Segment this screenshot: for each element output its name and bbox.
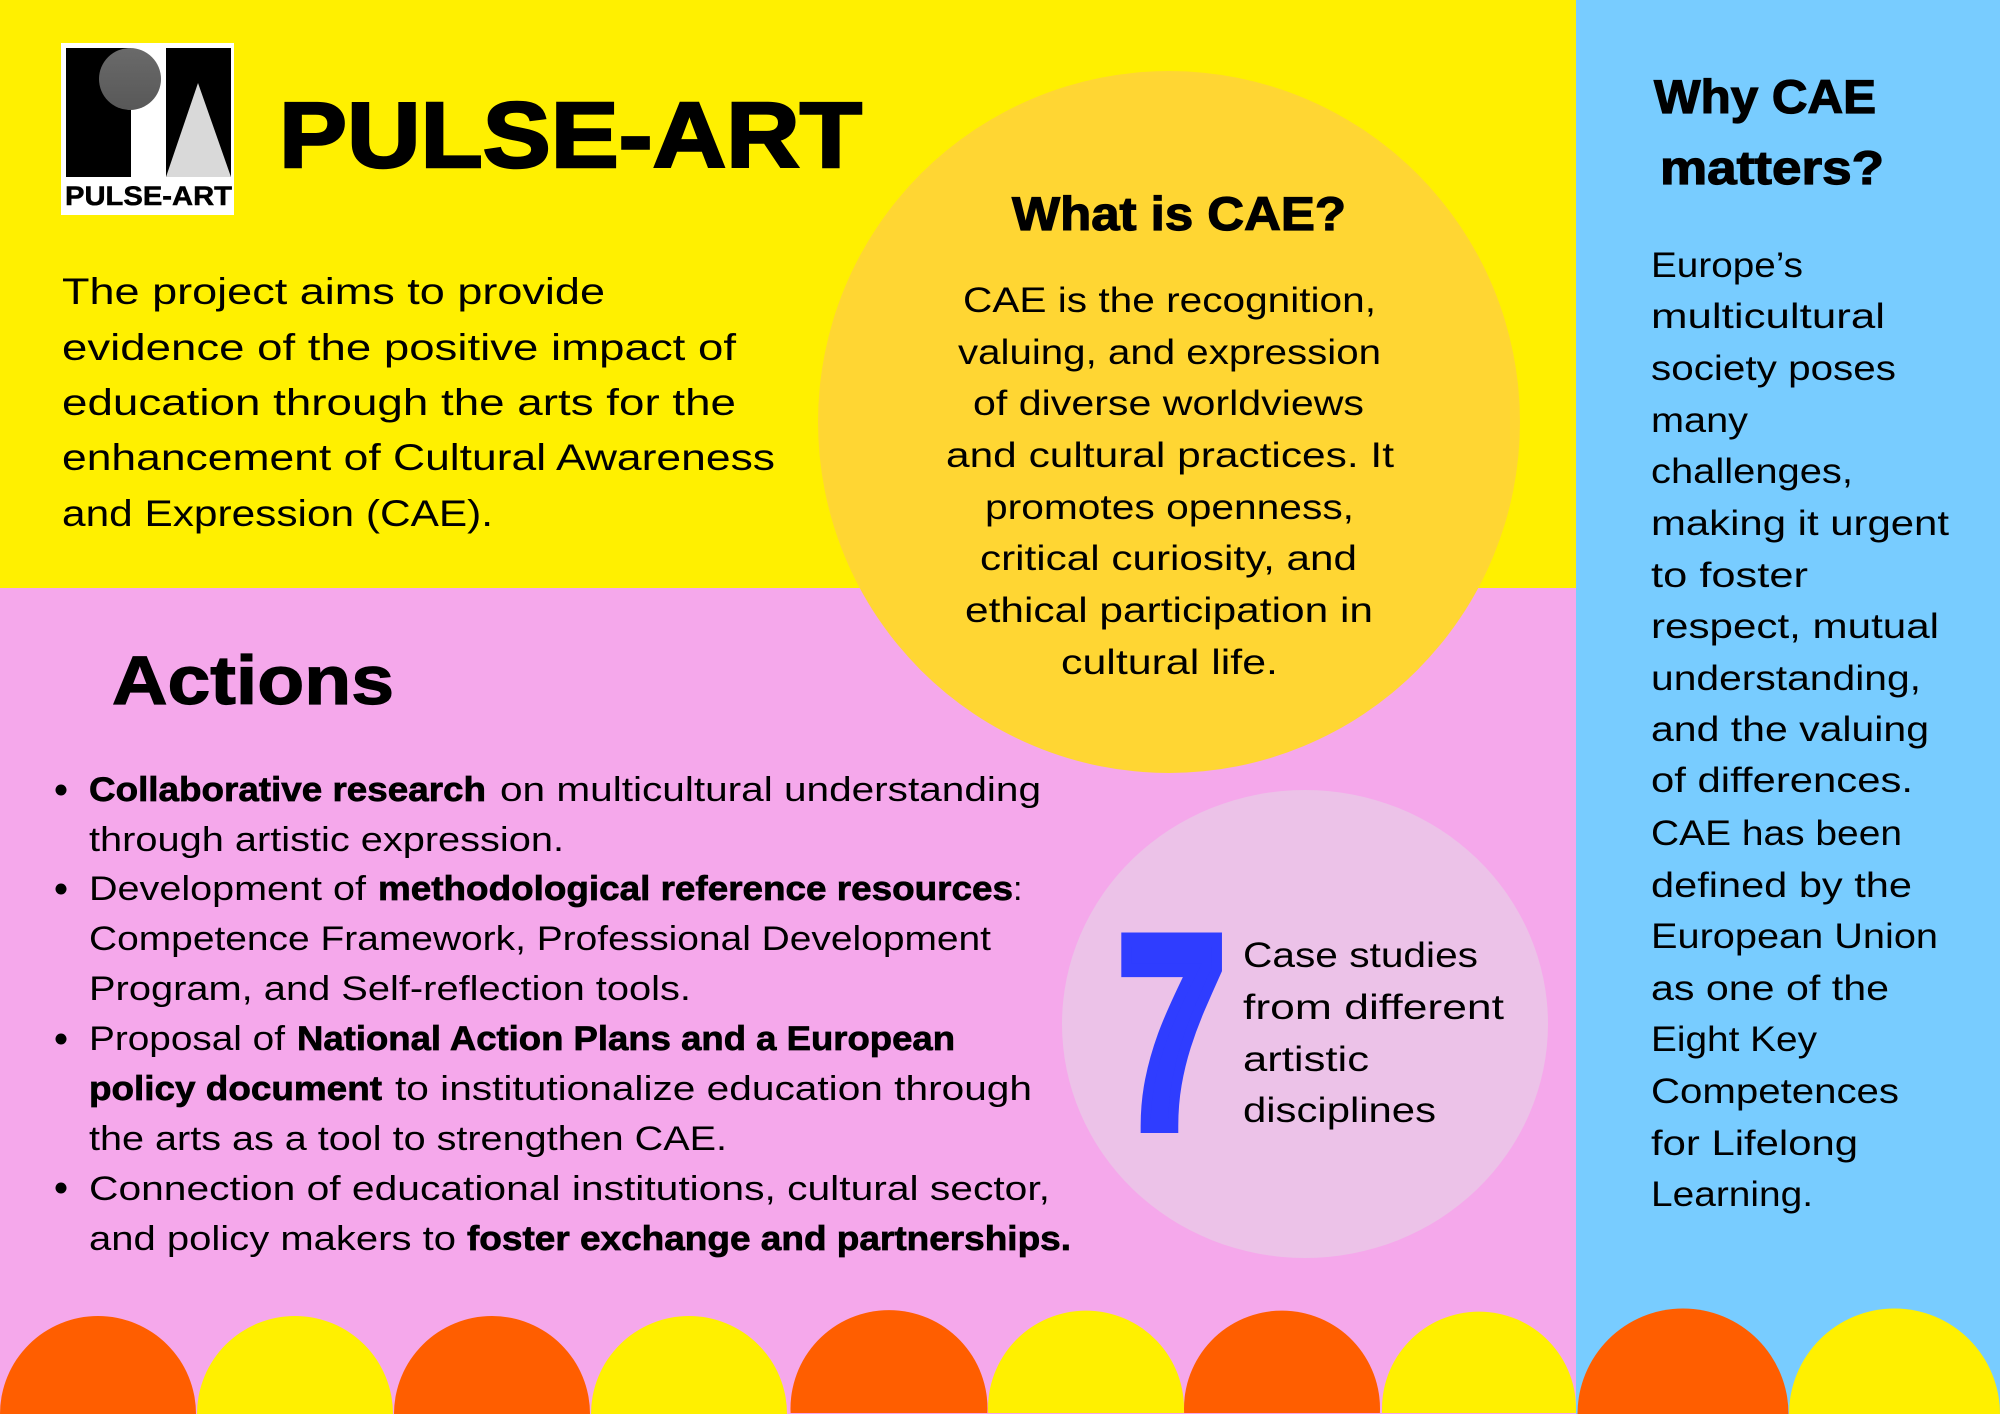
logo: PULSE-ART: PULSE-ART [65,181,233,211]
list item: collaborative research: Collaborative research [89,771,486,809]
text block: case studies label [1243,936,1504,1130]
number: 7: 7 [1118,881,1225,1184]
text block: project aim: education through the arts for the [62,382,736,423]
text block: CAE definition: CAE is the recognition, [963,281,1376,320]
text block: project aim: evidence of the positive impact of [62,327,737,368]
text block: CAE definition: of diverse worldviews [973,384,1364,423]
text block: why CAE matters: Eight Key [1651,1020,1818,1059]
text block: why CAE matters: CAE has been [1651,814,1902,853]
heading: why CAE matters: Why CAE [1654,70,1876,123]
heading: why CAE matters [1654,70,1884,194]
text block: why CAE matters: as one of the [1651,969,1889,1008]
text block: why CAE matters: understanding, [1651,659,1921,698]
list item: connection of institutions: Connection of educational institutions, cultural sector, [89,1170,1050,1208]
text block: why CAE matters: making it urgent [1651,504,1949,543]
panel: what is CAE circle [818,71,1520,773]
heading: what is CAE: What is CAE? [1012,187,1346,240]
text block: CAE definition: ethical participation in [965,591,1373,630]
list item: methodological reference resources: Development of [89,870,367,908]
panel: pink actions background [0,588,1576,1414]
text block: case studies label: Case studies [1243,936,1478,975]
text block: why CAE matters [1651,246,1949,1214]
heading: why CAE matters: matters? [1660,141,1884,194]
text block: project aim: enhancement of Cultural Awareness [62,437,775,478]
heading: actions: Actions [112,642,394,719]
logo: PULSE-ART [61,43,234,215]
text block: why CAE matters: for Lifelong [1651,1124,1858,1163]
text block: why CAE matters: to foster [1651,556,1808,595]
panel: blue why CAE matters background [1576,0,2000,1414]
text block: CAE definition: cultural life. [1061,643,1278,682]
text block: why CAE matters: multicultural [1651,297,1885,336]
title: PULSE-ART [279,83,862,187]
callout: 7 case studies [1062,790,1548,1258]
list item: connection of institutions [56,1170,1071,1258]
text block: CAE definition: valuing, and expression [958,333,1381,372]
list item: methodological reference resources: methodological reference resources [378,870,1013,908]
list item: national action plans: Proposal of [89,1020,286,1058]
text block: why CAE matters: Competences [1651,1072,1899,1111]
text block: why CAE matters: society poses [1651,349,1896,388]
text block: CAE definition: critical curiosity, and [980,539,1357,578]
text block: project aim: The project aims to provide [62,271,605,312]
text block: why CAE matters: of differences. [1651,761,1913,800]
list item: collaborative research: on multicultural understanding [500,771,1041,809]
text block: why CAE matters: respect, mutual [1651,607,1939,646]
text block: project aim: and Expression (CAE). [62,493,493,534]
list item: national action plans: policy document [89,1070,382,1108]
list: actions [56,771,1071,1258]
decorative semicircle band [0,1309,2000,1414]
list item: methodological reference resources [56,870,1022,1008]
panel: yellow project intro background [0,0,1576,588]
text block: CAE definition: promotes openness, [985,488,1354,527]
list item: national action plans [56,1020,1032,1158]
list item: connection of institutions: and policy makers to [89,1220,456,1258]
text block: case studies label: disciplines [1243,1091,1436,1130]
list item: national action plans: to institutionalize education through [395,1070,1032,1108]
list item: methodological reference resources: Competence Framework, Professional Development [89,920,992,958]
list item: national action plans: National Action Plans and a European [297,1020,955,1058]
text block: why CAE matters: Europe’s [1651,246,1803,285]
text block: CAE definition [946,281,1394,682]
text block: why CAE matters: many [1651,401,1749,440]
list item: methodological reference resources: Program, and Self-reflection tools. [89,970,691,1008]
list item: methodological reference resources: : [1013,870,1022,908]
list item: collaborative research [56,771,1041,859]
text block: CAE definition: and cultural practices. It [946,436,1394,475]
text block: why CAE matters: challenges, [1651,452,1853,491]
list item: national action plans: the arts as a tool to strengthen CAE. [89,1120,727,1158]
list item: connection of institutions: foster exchange and partnerships. [467,1220,1071,1258]
text block: case studies label: from different [1243,988,1504,1027]
text block: why CAE matters: Learning. [1651,1175,1813,1214]
text block: why CAE matters: European Union [1651,917,1938,956]
text block: why CAE matters: defined by the [1651,866,1912,905]
text block: why CAE matters: and the valuing [1651,710,1929,749]
text block: project aim [62,271,775,534]
list item: collaborative research: through artistic expression. [89,821,564,859]
text block: case studies label: artistic [1243,1040,1369,1079]
